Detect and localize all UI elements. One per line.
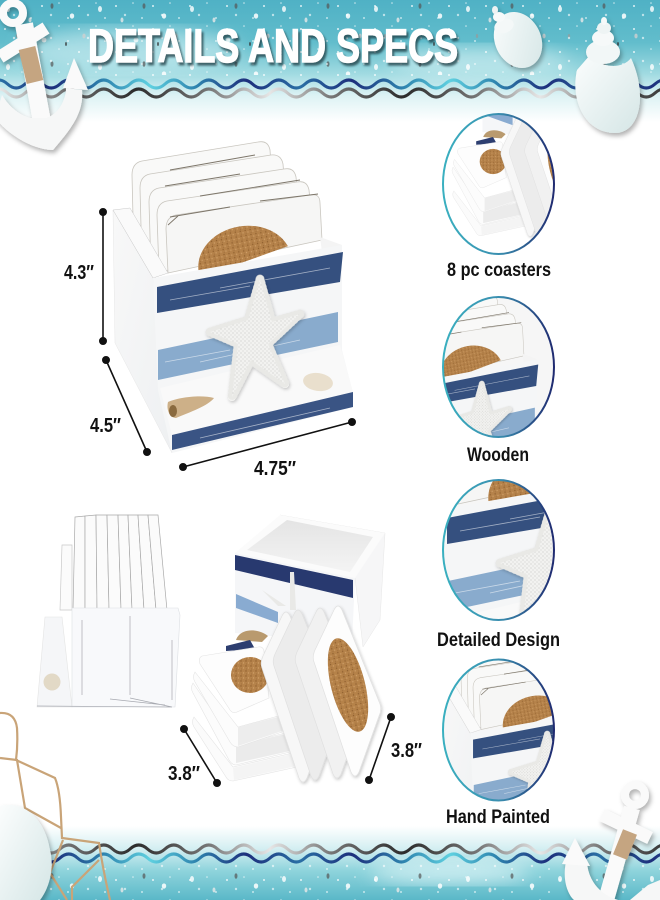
ledge side xyxy=(37,617,72,707)
flat coaster stack xyxy=(192,647,297,781)
dimension 4.75 width xyxy=(180,418,356,470)
dimension label 4.5: 4.5″ xyxy=(90,415,121,437)
blue stripe xyxy=(236,594,278,623)
box front xyxy=(153,245,353,453)
shell tan xyxy=(167,396,214,418)
oval detail: 8 pc coasters xyxy=(442,113,555,255)
label: wooden: Wooden xyxy=(467,445,529,466)
label: hand painted: Hand Painted xyxy=(446,807,550,828)
navy stripe top xyxy=(157,252,343,313)
dimension left 3.8 xyxy=(180,726,220,786)
dimension 4.5 depth xyxy=(102,356,150,456)
navy stripe bottom xyxy=(172,392,353,450)
light blue stripe xyxy=(158,312,338,380)
footer water background xyxy=(0,826,660,900)
product: assembled box with coasters xyxy=(113,142,353,453)
icon: shell bottom left xyxy=(0,805,52,900)
bottom layer xyxy=(192,717,297,781)
oval detail: wooden xyxy=(442,296,555,438)
left rim xyxy=(113,208,168,278)
ledge xyxy=(160,345,353,435)
paint scratches xyxy=(165,268,330,438)
shell small xyxy=(44,674,60,690)
flat cork xyxy=(231,657,269,693)
distress marks xyxy=(37,616,172,707)
icon: large shell top xyxy=(575,17,640,133)
footer waves xyxy=(0,845,660,862)
dimension label left 3.8: 3.8″ xyxy=(168,763,200,785)
coaster stack xyxy=(132,142,322,273)
coasters upright xyxy=(60,515,167,610)
coaster distress lines xyxy=(165,155,318,225)
shell cream xyxy=(302,371,334,393)
oval detail: hand painted xyxy=(442,658,555,802)
dimension label 4.3: 4.3″ xyxy=(64,262,94,284)
tilted cork xyxy=(320,634,376,736)
label: 8 pc coasters: 8 pc coasters xyxy=(447,260,551,281)
third layer xyxy=(192,683,290,765)
star fragment xyxy=(262,572,296,610)
cork disc xyxy=(192,218,298,310)
icon: small shell top xyxy=(485,4,551,76)
tan shell xyxy=(236,630,268,642)
header waves xyxy=(0,80,660,97)
header water background xyxy=(0,0,660,122)
navy stripe xyxy=(235,555,353,598)
dimension label 4.75: 4.75″ xyxy=(254,458,296,480)
navy fragment xyxy=(226,640,255,651)
dimension 4.3 height xyxy=(100,208,106,344)
top coaster xyxy=(199,647,269,713)
second layer xyxy=(194,672,282,747)
product: open box with coaster stacks xyxy=(192,515,385,782)
title: DETAILS AND SPECS xyxy=(88,19,458,72)
icon: anchor bottom right xyxy=(562,785,660,900)
open box xyxy=(226,515,385,651)
dimension right 3.8 xyxy=(366,714,394,784)
oval detail: detailed design xyxy=(442,479,555,621)
label: detailed design: Detailed Design xyxy=(437,630,560,651)
back rim xyxy=(320,237,342,252)
box body xyxy=(72,608,180,707)
tilted coaster stack xyxy=(261,606,381,782)
product: box back view with coasters xyxy=(37,515,180,707)
icon: rope net xyxy=(0,713,110,900)
starfish xyxy=(210,279,300,397)
box left side xyxy=(113,210,172,453)
icon: anchor top left xyxy=(0,3,88,150)
dimension label right 3.8: 3.8″ xyxy=(391,740,422,762)
